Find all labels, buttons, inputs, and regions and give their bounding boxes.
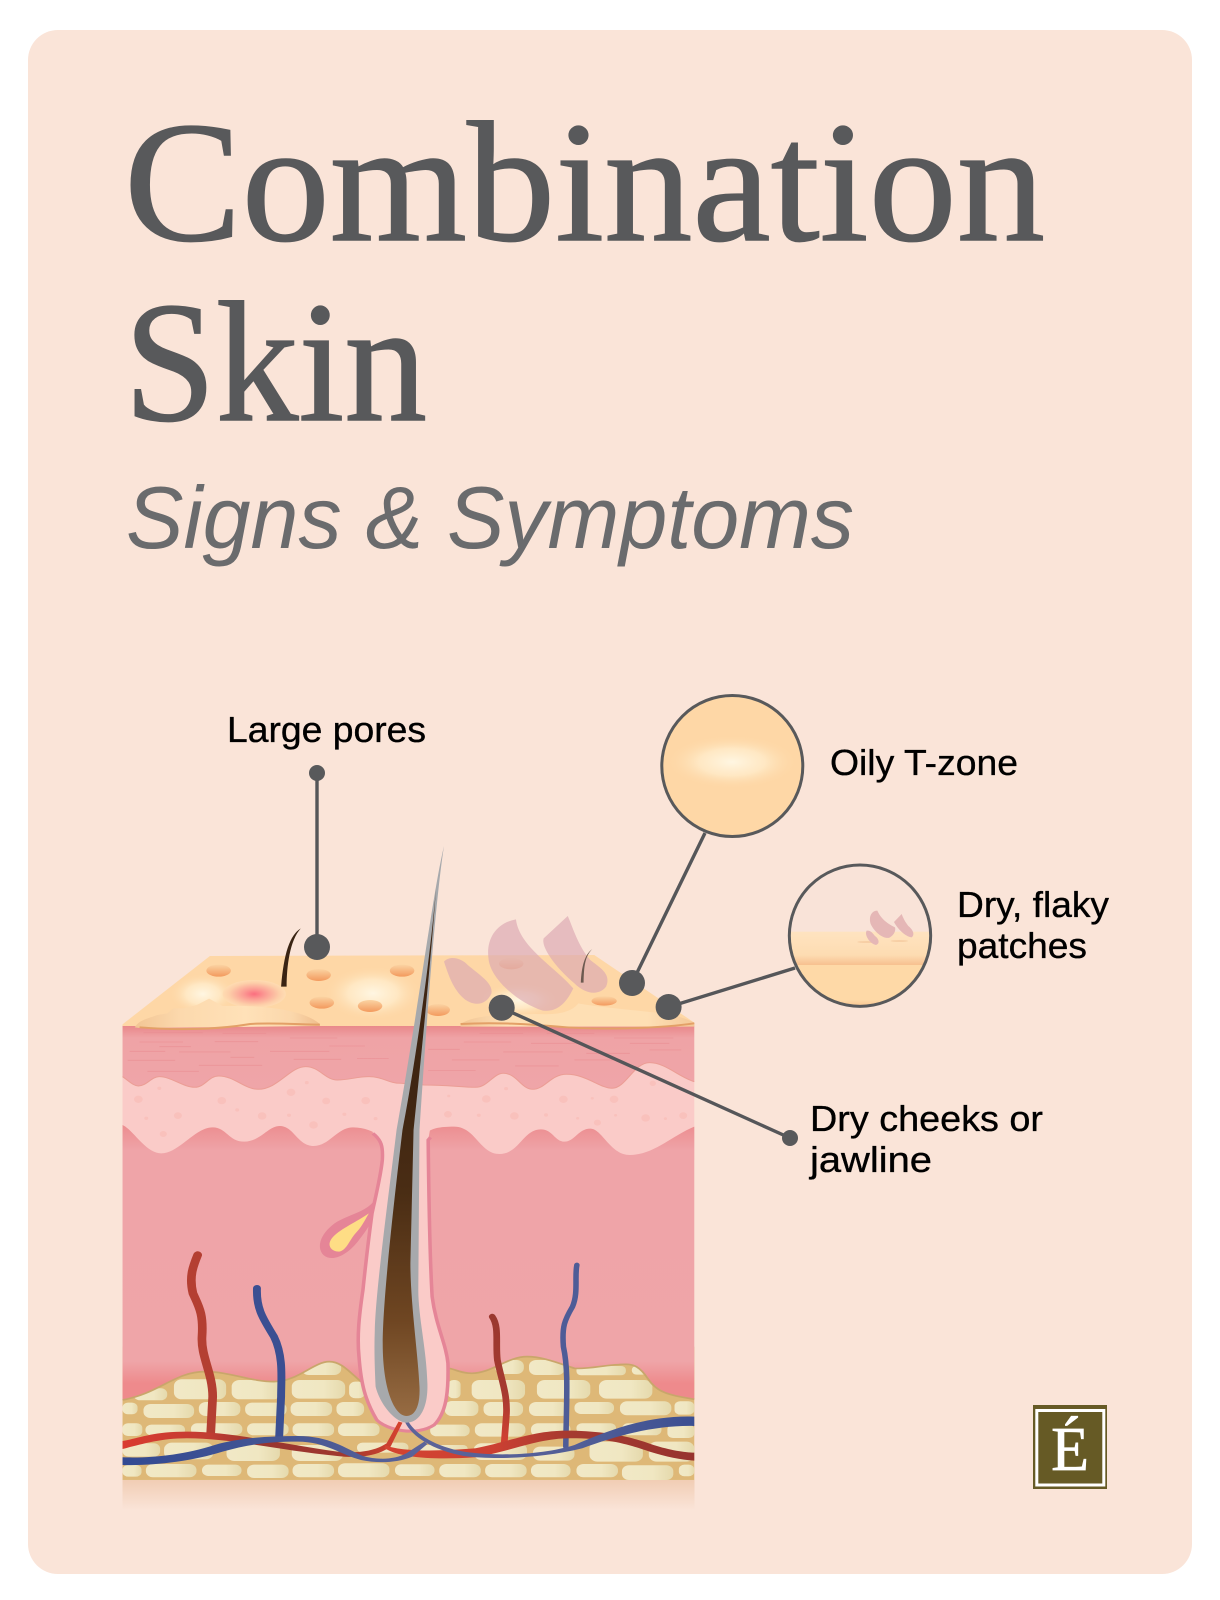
callout: dry, flaky patches: patches <box>957 925 1087 966</box>
skin surface <box>123 916 694 1029</box>
callout: dry, flaky patches: Dry, flaky <box>957 884 1109 925</box>
capillary: left blue <box>257 1288 281 1438</box>
callout: dry, flaky patches <box>656 863 1109 1020</box>
pores <box>206 965 617 1016</box>
dry flakes <box>444 916 608 1011</box>
artery: left branch <box>123 1422 402 1457</box>
callout: dry cheeks or jawline <box>489 995 1043 1180</box>
callout: dry cheeks or jawline: jawline <box>809 1139 932 1180</box>
blood vessels <box>123 1255 694 1465</box>
small hair left <box>281 928 301 987</box>
brand logo <box>1033 1405 1107 1489</box>
shadow under block <box>122 1480 694 1510</box>
vein: right branch <box>405 1417 694 1458</box>
hair follicle <box>358 1127 448 1431</box>
subtitle: Signs & Symptoms <box>126 468 854 567</box>
brand logo: É <box>1051 1416 1089 1484</box>
dermis layer <box>123 1125 694 1400</box>
capillary: left red <box>191 1255 213 1433</box>
callout: large pores <box>227 709 426 960</box>
small hair right <box>581 949 592 983</box>
callout: oily T-zone <box>619 696 1018 996</box>
epidermis layer <box>123 1025 694 1089</box>
artery: right branch <box>385 1431 694 1461</box>
capillary: right blue <box>563 1265 577 1447</box>
callout: oily T-zone: Oily T-zone <box>830 742 1018 783</box>
fat layer <box>123 1347 694 1480</box>
skin cross-section diagram <box>122 846 694 1510</box>
main hair shaft <box>374 846 444 1423</box>
capillary: right red <box>492 1317 507 1445</box>
pale middle skin layer <box>123 1060 694 1160</box>
title <box>124 88 1045 458</box>
title: Combination <box>124 88 1045 278</box>
callout: dry cheeks or jawline: Dry cheeks or <box>810 1098 1043 1139</box>
sebaceous gland <box>320 1202 375 1258</box>
surface redness <box>223 980 286 1008</box>
vein: left branch <box>123 1436 427 1465</box>
callout: large pores: Large pores <box>227 709 426 750</box>
raised skin edge <box>135 999 694 1029</box>
oily glow areas <box>169 966 559 1021</box>
title: Skin <box>124 268 427 458</box>
